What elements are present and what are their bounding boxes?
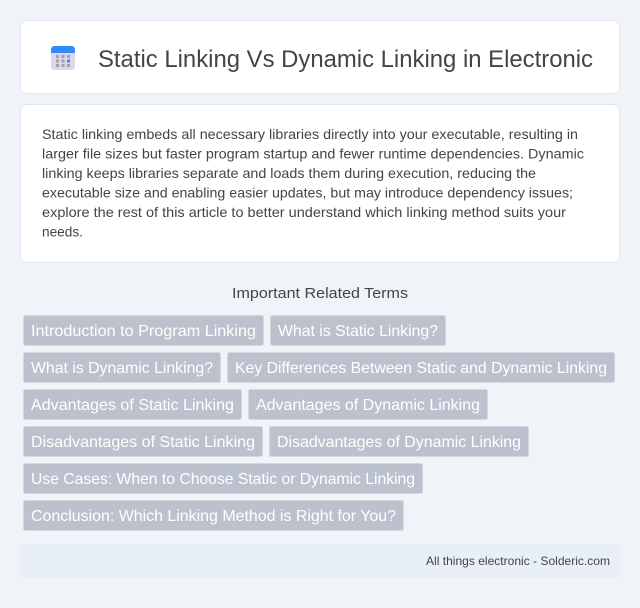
- panel: description: [20, 104, 620, 262]
- title: Static Linking Vs Dynamic Linking in Electronic: [98, 46, 593, 73]
- tag: What is Dynamic Linking?: [31, 360, 213, 377]
- tag list: [24, 316, 614, 530]
- tag: [24, 316, 264, 346]
- tag: Use Cases: When to Choose Static or Dynamic Linking: [31, 471, 415, 488]
- description text: linking keeps libraries separate and loads them during execution, reducing the: [42, 165, 536, 181]
- description text: larger file sizes but faster program startup and fewer runtime dependencies. Dynamic: [42, 146, 584, 162]
- tag: [24, 426, 262, 456]
- tag: Conclusion: Which Linking Method is Right for You?: [31, 508, 396, 525]
- description text: explore the rest of this article to better understand which linking method suits your: [42, 204, 566, 220]
- tag: Key Differences Between Static and Dynamic Linking: [235, 360, 607, 377]
- tag: What is Static Linking?: [278, 323, 438, 340]
- tag: [24, 390, 242, 420]
- description text: Static linking embeds all necessary libraries directly into your executable, resulting in: [42, 126, 578, 142]
- description text: [42, 126, 584, 240]
- tag: Introduction to Program Linking: [31, 323, 256, 340]
- heading: related terms: Important Related Terms: [232, 286, 408, 302]
- icon: calendar grid: [51, 46, 75, 70]
- tag: Disadvantages of Dynamic Linking: [277, 434, 521, 451]
- footer: All things electronic - Solderic.com: [426, 554, 610, 568]
- tag: [24, 352, 220, 382]
- tag: Advantages of Static Linking: [31, 397, 234, 414]
- tag: [270, 316, 446, 346]
- tag: [270, 426, 528, 456]
- tag: [228, 352, 614, 382]
- tag: [248, 390, 488, 420]
- header panel: [20, 20, 620, 94]
- tag: [24, 464, 422, 494]
- description text: executable size and enabling easier updates, but may introduce dependency issues;: [42, 184, 573, 200]
- tag: Advantages of Dynamic Linking: [256, 397, 480, 414]
- description text: needs.: [42, 224, 83, 240]
- footer: [20, 544, 620, 578]
- tag: Disadvantages of Static Linking: [31, 434, 255, 451]
- tag: [24, 500, 404, 530]
